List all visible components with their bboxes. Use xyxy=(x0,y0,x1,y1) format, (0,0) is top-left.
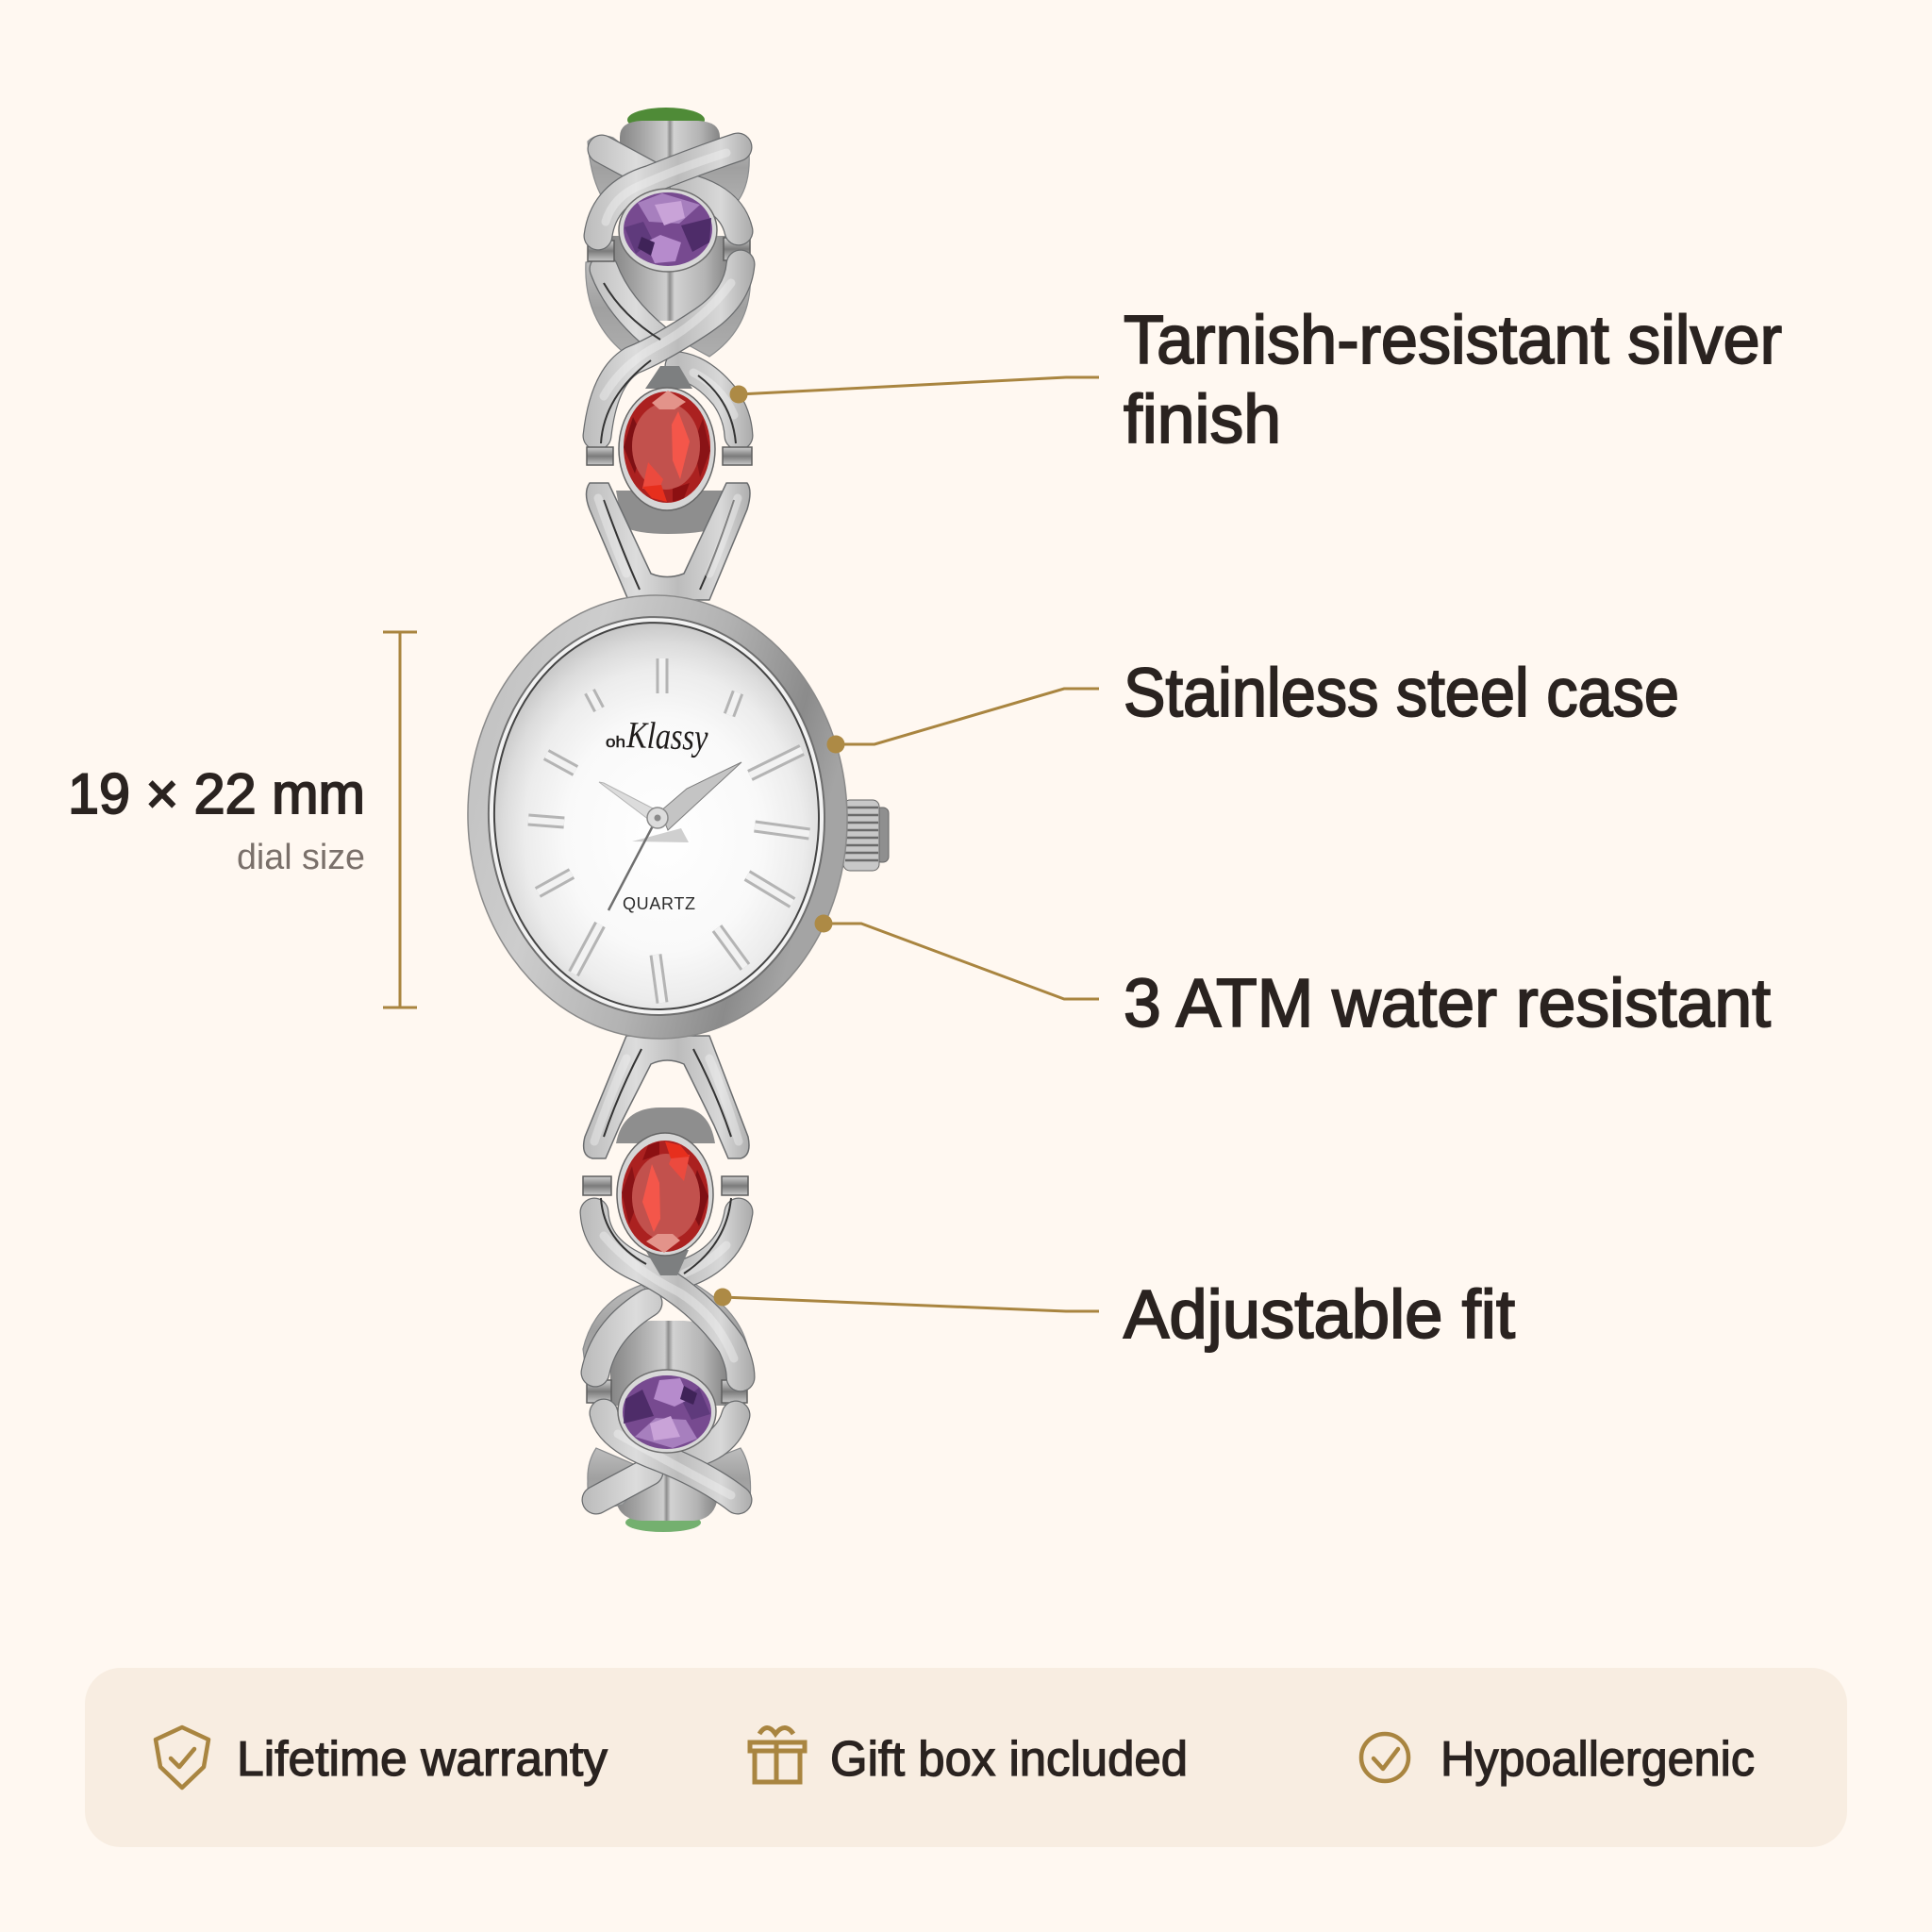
upper link cylinder xyxy=(611,236,728,321)
brand logo: Klassy xyxy=(625,713,708,758)
icon: red gem lower xyxy=(617,1133,713,1256)
icon: shield xyxy=(156,1727,208,1788)
case and dial xyxy=(460,589,855,1045)
bezel inner ring xyxy=(482,611,831,1021)
dial markers xyxy=(528,658,809,1003)
benefit: lifetime warranty: Lifetime warranty xyxy=(237,1732,608,1787)
callout: tarnish-resistant: Tarnish-resistant silver xyxy=(1124,303,1782,378)
callout: water resistant: 3 ATM water resistant xyxy=(1124,966,1771,1041)
shadow below red gem xyxy=(645,1250,689,1275)
connector bars at red gem xyxy=(587,447,752,465)
icon: check circle xyxy=(1361,1734,1408,1781)
callout: tarnish-resistant: finish xyxy=(1124,382,1281,458)
icon: green gem top xyxy=(627,108,705,132)
bottom link cylinder xyxy=(616,1472,717,1521)
dial label QUARTZ: QUARTZ xyxy=(623,894,695,913)
dial size caption: dial size xyxy=(237,838,365,877)
icon: crown xyxy=(843,800,889,871)
top link cylinder xyxy=(620,121,720,179)
connector bars lower xyxy=(587,1380,747,1403)
strap ribbon crossings xyxy=(597,147,741,436)
middle back wings xyxy=(583,1283,748,1379)
top back wings xyxy=(588,136,749,200)
brand logo: oh xyxy=(606,733,625,751)
connector bars at red gem lower xyxy=(583,1176,748,1195)
dial size value: 19 × 22 mm xyxy=(68,762,365,825)
cradle above lower red gem xyxy=(616,1108,715,1143)
benefit: gift box included: Gift box included xyxy=(830,1732,1188,1787)
icon: purple gem lower xyxy=(618,1370,716,1453)
icon: green gem bottom xyxy=(625,1513,701,1532)
shadow above red gem xyxy=(645,366,692,389)
bottom back wings xyxy=(588,1448,751,1509)
icon: purple gem upper xyxy=(619,189,717,272)
callout: adjustable fit xyxy=(713,1277,1515,1353)
brand logo xyxy=(606,713,708,758)
case outer ring xyxy=(460,589,855,1045)
callout: stainless steel case: Stainless steel case xyxy=(1124,656,1679,731)
callout: adjustable fit: Adjustable fit xyxy=(1124,1277,1515,1353)
connector bars upper xyxy=(588,238,750,261)
strap ribbons behind xyxy=(602,149,658,339)
benefit: hypoallergenic: Hypoallergenic xyxy=(1441,1732,1755,1787)
watch hands xyxy=(599,762,741,910)
strap groove lines lower xyxy=(601,1198,731,1274)
icon: red gem upper xyxy=(619,388,715,510)
upper lug xyxy=(587,483,750,600)
strap ribbons lower xyxy=(594,1212,741,1500)
upper bracelet xyxy=(586,108,752,600)
strap inner groove lines xyxy=(601,283,736,443)
lower bracelet xyxy=(583,1036,751,1532)
callout: tarnish-resistant xyxy=(730,303,1782,458)
callout: water resistant xyxy=(815,915,1771,1041)
callout: stainless steel case xyxy=(826,656,1679,753)
dimension bracket xyxy=(383,632,417,1008)
lower lug xyxy=(584,1036,749,1158)
watch product image xyxy=(460,108,889,1532)
icon: gift box xyxy=(750,1728,805,1782)
dial face xyxy=(488,617,825,1015)
panel: benefits xyxy=(85,1668,1847,1847)
lower link cylinder xyxy=(610,1321,726,1406)
lower back wings of upper link xyxy=(586,259,750,357)
cradle under red gem xyxy=(616,491,724,534)
